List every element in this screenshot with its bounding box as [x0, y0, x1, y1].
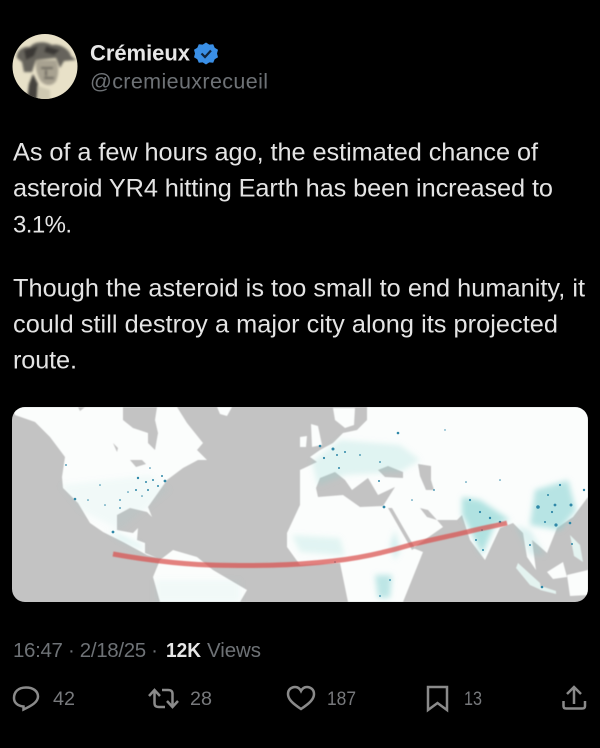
icon: share	[564, 687, 585, 708]
author handle: @cremieuxrecueil	[90, 70, 268, 94]
bookmark action	[428, 687, 482, 710]
repost action	[149, 689, 212, 710]
post timestamp and views: 16:47 · 2/18/25 ·	[13, 639, 158, 662]
bookmark action: 13	[464, 689, 482, 710]
author name: Crémieux	[90, 40, 191, 66]
post timestamp and views: 12K	[166, 640, 202, 662]
like action: 187	[327, 689, 356, 710]
map population tint	[60, 440, 576, 602]
post text: asteroid YR4 hitting Earth has been increased to	[13, 174, 553, 202]
asteroid risk corridor	[113, 523, 507, 566]
like action	[288, 687, 356, 710]
icon: heart	[288, 687, 314, 709]
map land masses	[12, 407, 588, 602]
icon: repost	[149, 690, 178, 707]
icon: verified badge	[194, 42, 218, 64]
map Southeast Asia islands	[516, 535, 583, 594]
map ocean	[12, 407, 588, 602]
reply action: 42	[53, 689, 75, 710]
map population dots	[65, 429, 585, 597]
post timestamp and views: Views	[207, 639, 261, 662]
repost action: 28	[190, 689, 212, 710]
post text: As of a few hours ago, the estimated chance of	[13, 138, 539, 166]
post text: route.	[13, 346, 77, 374]
map inland seas	[78, 407, 437, 550]
avatar	[12, 33, 78, 100]
icon: bookmark	[428, 687, 447, 710]
post text: Though the asteroid is too small to end humanity, it	[13, 274, 585, 302]
map: projected asteroid route	[12, 407, 588, 602]
post text: 3.1%.	[13, 212, 72, 238]
icon: reply	[14, 688, 38, 710]
post text	[13, 138, 585, 374]
post text: could still destroy a major city along its projected	[13, 310, 558, 338]
post timestamp and views	[13, 639, 261, 662]
reply action	[14, 688, 75, 710]
